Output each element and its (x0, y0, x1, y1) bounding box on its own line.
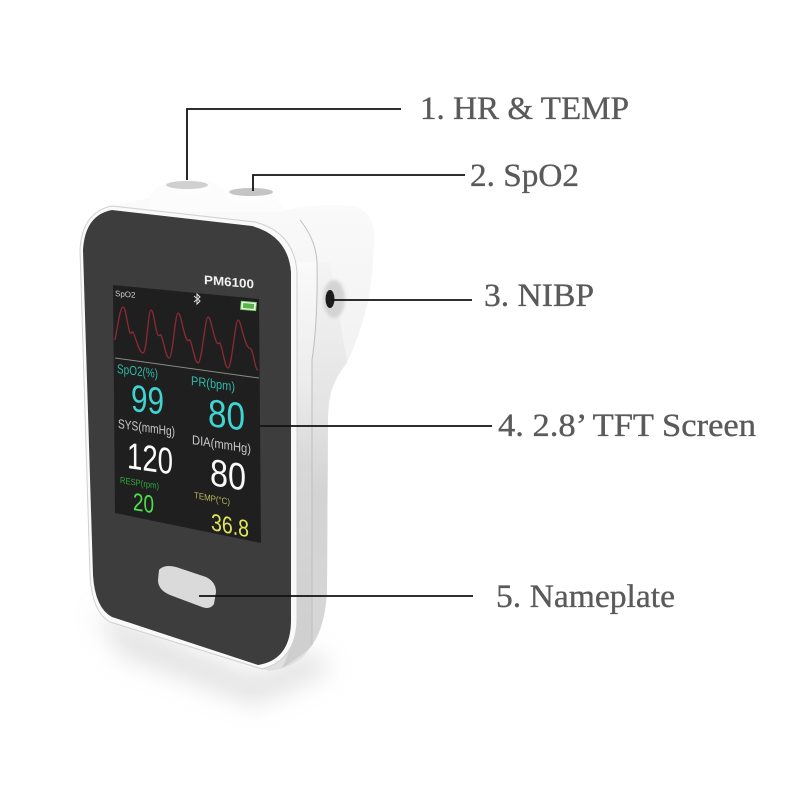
leader line 5 (199, 595, 473, 597)
front bezel (80, 206, 297, 669)
leader line 4 (260, 425, 492, 427)
RESP reading (120, 475, 159, 519)
device body (80, 180, 374, 671)
TEMP reading: 36.8 (211, 509, 249, 543)
PR reading: 80 (208, 392, 245, 440)
sensor port 1: HR and TEMP (163, 181, 213, 195)
DIA reading: 80 (210, 451, 246, 500)
pleth waveform (115, 307, 258, 370)
SpO2 reading: 99 (131, 378, 164, 423)
SYS reading: 120 (127, 434, 173, 482)
DIA reading (192, 432, 251, 500)
screen panel (113, 285, 261, 543)
floor shadow (95, 610, 330, 705)
label 2: 2. SpO2 (470, 158, 579, 194)
label 1: 1. HR & TEMP (420, 91, 629, 127)
RESP reading: 20 (133, 488, 154, 519)
button housing highlight (150, 180, 284, 212)
status bar: SpO2 (115, 289, 136, 300)
model name: PM6100 (204, 273, 254, 291)
TEMP reading: TEMP(°C) (194, 490, 230, 507)
leader line 2 (253, 175, 465, 191)
sensor port 2: SpO2 (226, 188, 276, 203)
divider (115, 358, 259, 378)
dark front face (83, 210, 291, 665)
status bar (115, 289, 256, 311)
PR reading (191, 373, 245, 440)
SYS reading: SYS(mmHg) (118, 416, 175, 439)
side strip inner (282, 262, 317, 668)
SYS reading (118, 416, 175, 482)
RESP reading: RESP(rpm) (120, 475, 159, 491)
SpO2 reading (117, 361, 164, 423)
nameplate (158, 566, 216, 608)
PR reading: PR(bpm) (191, 373, 235, 394)
NIBP connector (323, 280, 345, 318)
label 3: 3. NIBP (484, 278, 594, 314)
label 5: 5. Nameplate (496, 579, 675, 615)
leader line 1 (187, 109, 401, 180)
monitor device (80, 180, 374, 671)
leader line 3 (331, 299, 472, 301)
body seam (300, 220, 317, 645)
screen (113, 285, 261, 543)
label 4: 4. 2.8’ TFT Screen (498, 408, 756, 444)
DIA reading: DIA(mmHg) (192, 432, 251, 456)
TEMP reading (194, 490, 249, 543)
SpO2 reading: SpO2(%) (117, 361, 158, 381)
side strip outer (312, 262, 347, 645)
